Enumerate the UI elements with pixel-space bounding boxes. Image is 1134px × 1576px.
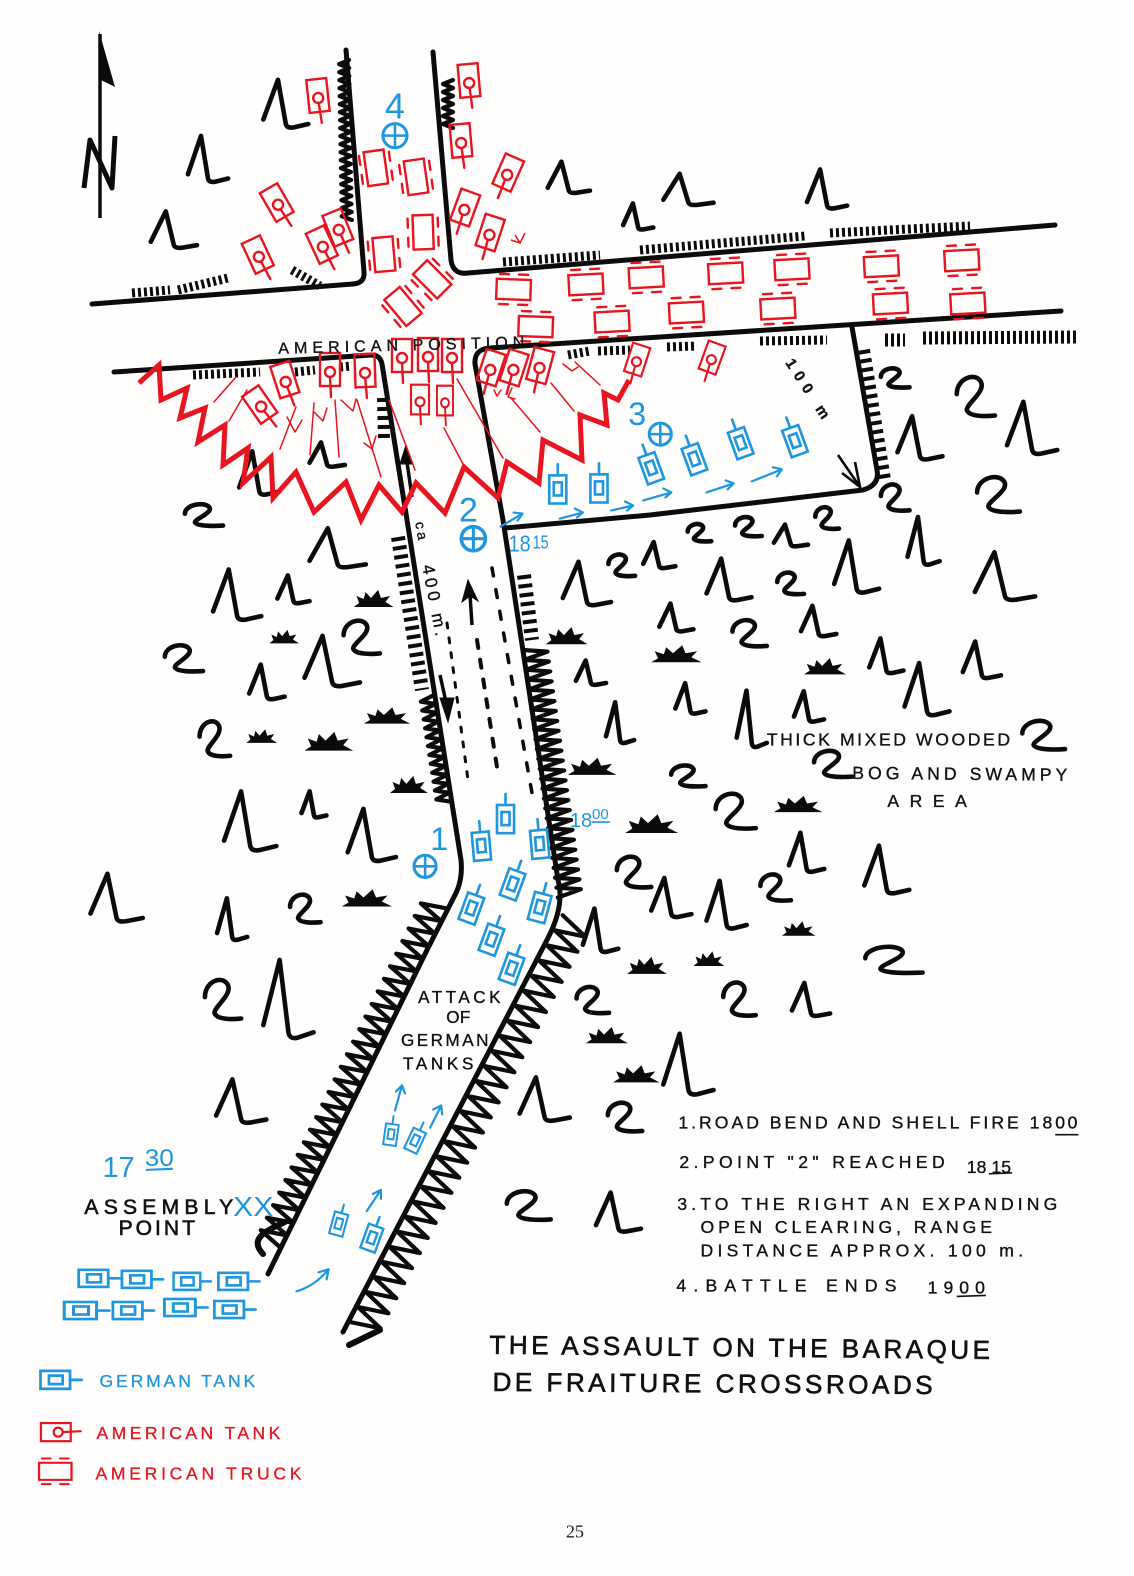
label: attack of German tanks [401, 988, 501, 1073]
numbered marker 1 [414, 821, 448, 877]
chronology notes: DISTANCE APPROX. 100 m. [700, 1240, 1023, 1260]
legend: American truck [39, 1459, 302, 1484]
chronology notes: OPEN CLEARING, RANGE [700, 1217, 992, 1237]
numbered marker 2 with time 18:15: 15 [533, 533, 549, 553]
numbered marker 4: 4 [385, 86, 405, 127]
label: attack of German tanks: ATTACK [418, 988, 501, 1007]
numbered marker 3: 3 [628, 396, 646, 432]
title [489, 1330, 990, 1400]
label: 400 m: 400 m. [418, 563, 451, 638]
chronology notes [676, 1113, 1078, 1297]
chronology notes: 18 15 [967, 1157, 1011, 1177]
label: 100 m: 100 m [782, 356, 833, 422]
time label 17:30: 17 [103, 1152, 135, 1184]
chronology notes: 1900 [928, 1277, 985, 1297]
chronology notes: 1.ROAD BEND AND SHELL FIRE 18 [678, 1113, 1052, 1133]
assembly point label: ASSEMBLY [84, 1196, 233, 1219]
label: attack of German tanks: TANKS [403, 1054, 473, 1073]
red front line [139, 365, 629, 520]
label: thick mixed wooded bog and swampy area: THICK MIXED WOODED [767, 730, 1010, 750]
title: DE FRAITURE CROSSROADS [492, 1367, 933, 1400]
page number: 25 [566, 1522, 584, 1542]
label: attack of German tanks: OF [446, 1008, 470, 1027]
trees and bog symbols: wooded swamp area [90, 80, 1065, 1232]
label: thick mixed wooded bog and swampy area [767, 730, 1068, 811]
time label 18:00 [570, 806, 610, 832]
legend [39, 1371, 302, 1484]
chronology notes: 4.BATTLE ENDS [676, 1275, 896, 1295]
legend: American tank: AMERICAN TANK [96, 1423, 281, 1443]
American trucks [359, 149, 986, 342]
chronology notes: 00 [1055, 1113, 1078, 1133]
label: attack of German tanks: GERMAN [401, 1031, 488, 1050]
label: thick mixed wooded bog and swampy area: BOG AND SWAMPY [852, 763, 1068, 785]
numbered marker 2 with time 18:15 [459, 492, 549, 557]
time label 17:30 [103, 1145, 174, 1184]
legend: German tank: GERMAN TANK [99, 1371, 256, 1391]
legend: American truck: AMERICAN TRUCK [95, 1463, 302, 1483]
American tanks [242, 63, 726, 433]
roadside hatching [132, 60, 1078, 1345]
American fire lines [214, 233, 600, 477]
chronology notes: 2.POINT "2" REACHED [679, 1152, 945, 1172]
title: THE ASSAULT ON THE BARAQUE [489, 1330, 990, 1365]
label: American position: AMERICAN POSITION [278, 333, 525, 358]
German tanks [64, 415, 808, 1319]
chronology notes: 3.TO THE RIGHT AN EXPANDING [677, 1194, 1057, 1214]
assembly point label: POINT [119, 1217, 195, 1240]
icon: north arrow [84, 31, 115, 218]
numbered marker 1: 1 [430, 821, 448, 857]
numbered marker 4 [383, 86, 407, 148]
label: thick mixed wooded bog and swampy area: AREA [887, 791, 967, 811]
numbered marker 3 [628, 396, 671, 445]
road edges [92, 50, 1061, 1332]
assembly point label: XX [233, 1191, 274, 1222]
label: distance ca: ca [412, 520, 431, 541]
blue movement arrows [296, 467, 782, 1291]
dashed tank tracks [447, 568, 532, 793]
numbered marker 2 with time 18:15: 18 [509, 531, 531, 557]
time label 17:30: 30 [145, 1145, 174, 1172]
time label 18:00: 18 [570, 810, 592, 832]
black direction arrows [400, 445, 860, 722]
time label 18:00: 00 [592, 806, 609, 823]
numbered marker 2 with time 18:15: 2 [459, 492, 478, 530]
assembly point label [84, 1191, 274, 1240]
